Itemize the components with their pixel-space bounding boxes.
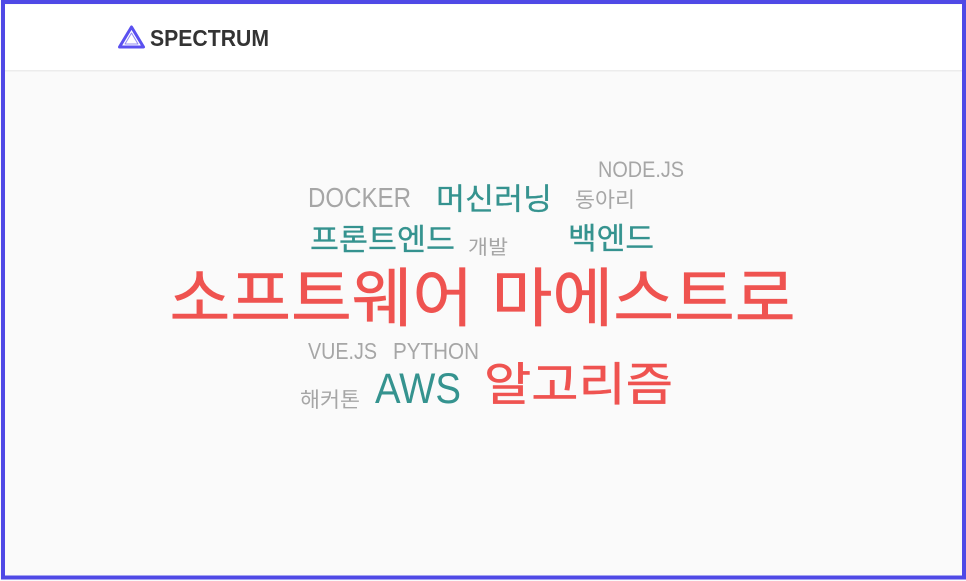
word cloud [170, 157, 796, 413]
brand name: SPECTRUM [150, 25, 269, 51]
word: NODE.JS: NODE.JS [598, 157, 684, 182]
word: 백엔드: 백엔드 [568, 223, 654, 256]
word: VUE.JS: VUE.JS [308, 338, 377, 364]
word: 동아리: 동아리 [575, 189, 635, 212]
word: 개발: 개발 [468, 236, 508, 259]
header bar [3, 5, 963, 72]
word: 알고리즘: 알고리즘 [484, 358, 673, 410]
word: 프론트엔드: 프론트엔드 [310, 224, 455, 257]
word: 소프트웨어 마에스트로: 소프트웨어 마에스트로 [170, 263, 796, 335]
word: AWS: AWS [375, 365, 461, 413]
word: DOCKER: DOCKER [308, 182, 411, 213]
icon: spectrum triangle logo [120, 27, 144, 47]
word: 해커톤: 해커톤 [300, 389, 360, 412]
word: PYTHON: PYTHON [393, 338, 479, 364]
word: 머신러닝: 머신러닝 [436, 184, 552, 216]
